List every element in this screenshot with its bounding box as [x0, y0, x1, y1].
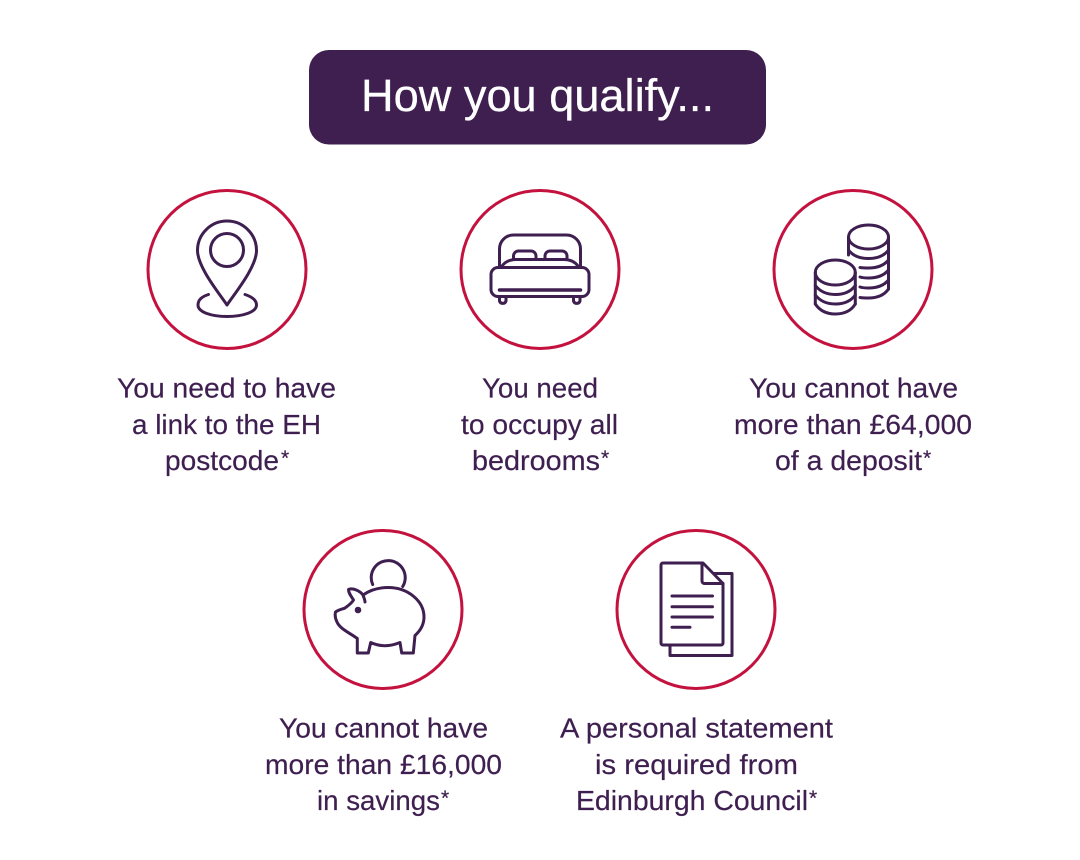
text: savings limit: You cannot have [279, 712, 488, 744]
text: deposit limit: You cannot have [749, 372, 958, 404]
item: deposit limit [734, 190, 972, 476]
text: deposit limit: * [923, 447, 931, 470]
text: occupy all bedrooms: bedrooms [472, 445, 600, 476]
text: EH postcode link: You need to have [117, 372, 336, 404]
text: EH postcode link [117, 372, 336, 476]
icon: piggy bank with coin [304, 530, 462, 688]
text: savings limit: more than £16,000 [265, 749, 502, 780]
text: deposit limit: of a deposit [775, 445, 922, 476]
item: occupy all bedrooms [461, 190, 619, 476]
text: personal statement: Edinburgh Council [576, 785, 808, 816]
text: savings limit: in savings [317, 785, 440, 816]
text: deposit limit [734, 372, 972, 476]
item: personal statement [560, 530, 833, 816]
text: personal statement: is required from [595, 749, 798, 780]
text: savings limit: * [441, 787, 449, 810]
title banner: How you qualify... [361, 70, 714, 121]
text: occupy all bedrooms: * [601, 447, 609, 470]
text: personal statement [560, 712, 833, 816]
text: EH postcode link: postcode [165, 445, 279, 476]
icon: documents [617, 530, 775, 688]
text: deposit limit: more than £64,000 [734, 409, 972, 440]
icon: location pin [148, 190, 306, 348]
title banner [309, 50, 766, 144]
text: occupy all bedrooms [461, 372, 618, 476]
text: savings limit [265, 712, 502, 816]
text: personal statement: A personal statement [560, 712, 833, 744]
icon: bed [461, 190, 619, 348]
icon: coin stacks [774, 190, 932, 348]
text: occupy all bedrooms: to occupy all [461, 409, 618, 440]
text: occupy all bedrooms: You need [482, 372, 598, 404]
text: personal statement: * [809, 787, 817, 810]
text: EH postcode link: * [281, 447, 289, 470]
item: EH postcode link [117, 190, 336, 476]
item: savings limit [265, 530, 502, 816]
text: EH postcode link: a link to the EH [132, 409, 321, 440]
